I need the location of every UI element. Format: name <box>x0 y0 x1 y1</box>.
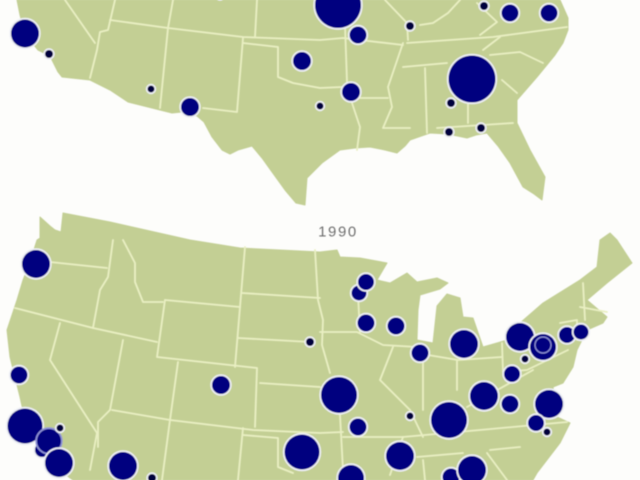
data bubbles: lower map <box>8 250 588 480</box>
data bubbles: upper map <box>11 0 558 136</box>
land: upper map southern states <box>17 0 568 205</box>
state borders: lower map <box>15 240 607 480</box>
land: lower map contiguous states <box>7 213 632 480</box>
map: upper United States map <box>11 0 568 205</box>
map: lower United States map <box>7 213 632 480</box>
state borders: upper map <box>65 0 567 150</box>
year label: 1990 <box>318 224 358 240</box>
